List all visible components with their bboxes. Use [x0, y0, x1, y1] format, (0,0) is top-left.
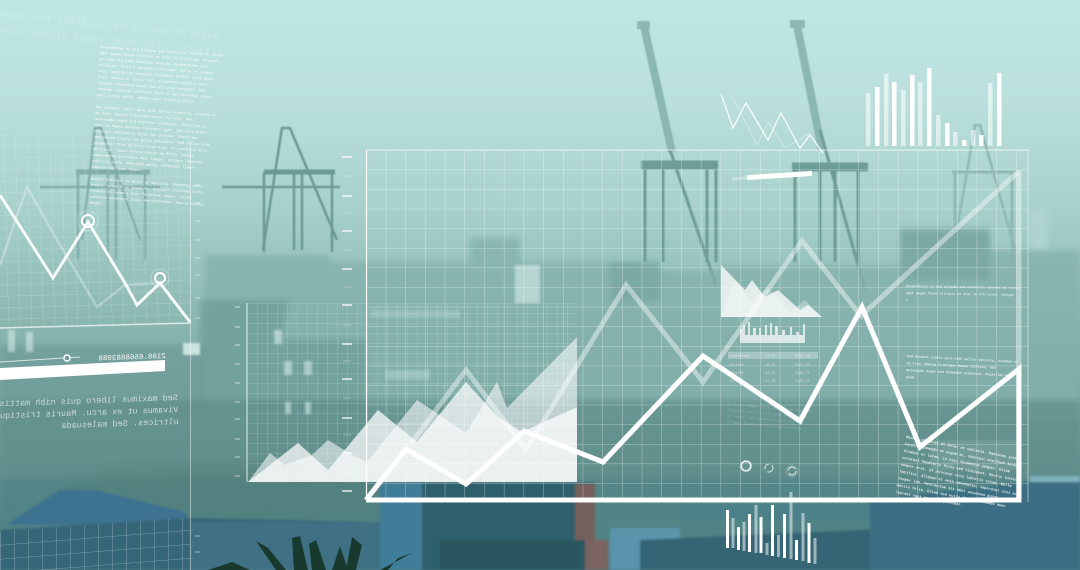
text block: right paragraph two	[906, 354, 1018, 385]
text block: right paragraph one: Suspendisse at sed aliquam sem convallis laoreet mi vitae	[906, 284, 1019, 290]
bar chart bottom	[726, 492, 816, 564]
text block: right paragraph one	[906, 284, 1019, 304]
text block: upper left paragraph: mollis ut. Fusce varius mauris ut felis. Aenean	[93, 147, 194, 159]
text block: upper left paragraph: turpis, commodo ac augue ac, suscipit eleifend lorem.	[90, 183, 205, 196]
faded background line chart	[412, 170, 1019, 450]
text block: upper left paragraph: semper.	[89, 201, 104, 207]
text block: upper left paragraph: Suspendisse at sed aliquam sem convallis laoreet mi vitae	[100, 45, 223, 59]
text block: right paragraph three: semper erat, at pulvinar urna lobortis vitae. Nulla	[900, 463, 1013, 489]
text block: upper left paragraph: eget augue fusce ultrices at erat in ultricies. Integer	[99, 51, 218, 64]
mini line chart top right	[721, 94, 823, 153]
left chart main line	[0, 195, 190, 322]
text block: upper left paragraph: Vivamus dignissim lacus non ultrices suscipit. Nam	[97, 81, 206, 93]
axis ticks: main chart	[195, 157, 352, 552]
background: haze over lower left	[60, 465, 440, 525]
data table: 21.48	[765, 380, 776, 384]
data table: 17.03	[765, 355, 776, 359]
text block: upper left paragraph: efficitur felis a accumsan tincidunt. Nulla et tempor	[99, 63, 213, 76]
text block: right paragraph three: mattis felis. Etiam sed nulla dictum, commodo nunc	[896, 483, 1006, 509]
text block: faded paragraph under table: ut tortor vel elementum sagittis nunc	[727, 414, 805, 426]
text block: right paragraph three	[895, 435, 1026, 518]
text block: right paragraph one: eget augue fusce ultrices at erat in ultricies. Integer	[906, 291, 1015, 297]
text block: upper left paragraph: vestibulum ligula nec purus efficitur. Sed varius nunc	[94, 135, 210, 148]
mini waveform bars	[740, 322, 805, 343]
text block: upper left paragraph: ex arcu. Mauris tristique massa ultrices. Sed	[95, 111, 192, 123]
mini area chart	[721, 265, 822, 317]
text block: upper left paragraph: Sed maximus libero quis nibh mattis vehicula, vivamus ut	[96, 105, 217, 118]
data table: 1172845	[729, 380, 744, 384]
text block: upper left paragraph: Vivamus et lorem a nisi fermentum semper. Etiam	[90, 189, 192, 201]
text block: faded paragraph under table: tincidunt mollis cras quam erat cursus	[727, 408, 807, 420]
text block: right paragraph three: laoreet eget lorem ac pulvinar.	[895, 490, 963, 508]
data table: 6120.35	[795, 380, 810, 384]
text block: upper left paragraph: eget cursus nulla. Aenean eget ultrices felis.	[97, 93, 196, 105]
text block: right paragraph three: tempor leo. Vestibulum sit amet accumsan purus, non	[898, 476, 1009, 503]
left chart grid	[0, 135, 190, 325]
faded header text top left: nunc sed dapibus leo in scelerisque	[0, 8, 220, 43]
text block: upper left paragraph: orci. Vestibulum molestie tincidunt mollis. Cras quam	[98, 69, 213, 82]
text block: right paragraph two: malesuada magna sed bibendum vulputate. Phasellus ut	[906, 368, 1009, 377]
text block: upper left paragraph: vulputate. Cras mollis rutrum nisi, et convallis arcu	[93, 141, 208, 154]
data table	[728, 352, 818, 384]
faded header text top left: odio turpis fusce quam nisi lobortis	[0, 24, 225, 60]
text block: faded paragraph under table: vivamus dignissim lacus non ultrices	[726, 420, 802, 432]
faded header text top left	[0, 8, 226, 60]
icon: palm tree	[208, 536, 412, 570]
text block: right paragraph one: a	[906, 298, 908, 302]
data table: Investment	[729, 355, 750, 359]
bar chart top right	[866, 68, 1002, 146]
background: city mass	[0, 208, 1080, 570]
text block: upper left paragraph: feugiat sed nunc tempor.	[91, 165, 143, 173]
background: port skyline	[40, 24, 1018, 290]
background: bright dock details	[8, 265, 1020, 470]
data table: 3497.22	[795, 364, 810, 368]
text block: upper left paragraph: volutpat hendrerit felis sed tincidunt. Mauris luctus	[89, 195, 204, 208]
icons: progress rings	[741, 461, 798, 477]
marker: left chart peak	[78, 211, 98, 231]
mirrored number: 2188.6568883988	[98, 353, 166, 363]
mirrored caption	[0, 393, 179, 433]
slider line with knob	[0, 355, 80, 362]
background: foreground buildings	[0, 476, 1080, 570]
main line chart: thick white line	[366, 307, 1019, 500]
area chart: layered white peaks	[248, 337, 577, 482]
text block: right paragraph two: Sed maximus libero quis nibh mattis vehicula, vivamus ut	[907, 354, 1018, 364]
data table: 3394182	[729, 372, 744, 376]
data table: 10.37	[765, 364, 776, 368]
left chart faded line	[0, 187, 190, 322]
text block: faded paragraph under table: Nulla et tempor orci vestibulum molestie	[728, 402, 812, 414]
panel: left perspective chart	[0, 135, 191, 570]
text block: right paragraph two: quam.	[906, 375, 916, 379]
text block: right paragraph three: Mauris placerat ex dolor ac vehicula. Maecenas justo	[906, 435, 1020, 462]
text block: right paragraph three: volutpat hendrerit felis sed tincidunt. Mauris luctus	[902, 456, 1018, 483]
text block: right paragraph three: Vivamus et lorem, in nisi fermentum semper. Etiam	[903, 449, 1011, 475]
text block: upper left paragraph	[89, 45, 223, 214]
text block: right paragraph three: turpis, commodo ac augue ac, suscipit eleifend lorem.	[904, 442, 1020, 469]
text block: right paragraph three: facilisi. Aliquam et enim venenatis, imperdiet nisi eu,	[899, 469, 1019, 498]
text block: upper left paragraph: ac urna sed diam molestie feugiat. Suspendisse sed	[99, 57, 207, 69]
text block: upper left paragraph: vehicula vestibulum felis non pretium. Phasellus	[94, 129, 198, 141]
panel: main chart grid	[366, 150, 1028, 502]
marker: left chart second peak	[151, 269, 169, 287]
mirrored caption: ultrices. Sed malesuada	[61, 417, 179, 431]
data table: 5482.18	[795, 355, 810, 359]
crane silhouettes	[40, 24, 1018, 290]
text block: upper left paragraph: quam eu magna posuere tincidunt eget. Sed nisl proin	[94, 123, 207, 136]
text block: upper left paragraph: erat, cursus ut tortor vel, elementum sagittis nunc.	[98, 75, 210, 88]
left chart axis	[190, 140, 192, 570]
data table: 2012304	[729, 364, 744, 368]
data table: 44.10	[765, 372, 776, 376]
text block: upper left paragraph: vehicula justo. Maecenas purus, efficitur libero	[92, 159, 196, 171]
text block: upper left paragraph: condimentum tincidunt nunc congue. Integer lobortis	[92, 153, 202, 165]
mini progress bar	[732, 171, 812, 180]
mirrored caption: Vivamus ut ex arcu. Mauris tristique	[0, 405, 179, 421]
text block: upper left paragraph: Mauris placerat ex dolor ac vehicula. Maecenas justo	[91, 177, 203, 189]
data table: 2098.71	[795, 372, 810, 376]
text block: right paragraph two: ex arcu. Mauris tristique massa ultrices. Sed	[907, 361, 996, 370]
panel: bottom-left perspective grid	[0, 517, 190, 570]
text block: upper left paragraph: commodo lobortis eleifend. Duis et pellentesque magna	[97, 87, 212, 100]
panel: small grid behind area chart	[247, 303, 577, 482]
left chart baseline	[0, 323, 191, 328]
mirrored caption: Sed maximus libero quis nibh mattis	[0, 393, 178, 409]
text block: faded paragraph under table	[726, 402, 812, 432]
thick progress bar	[0, 360, 165, 380]
text block: upper left paragraph: malesuada magna sed bibendum vulputate. Phasellus ut	[95, 117, 207, 130]
